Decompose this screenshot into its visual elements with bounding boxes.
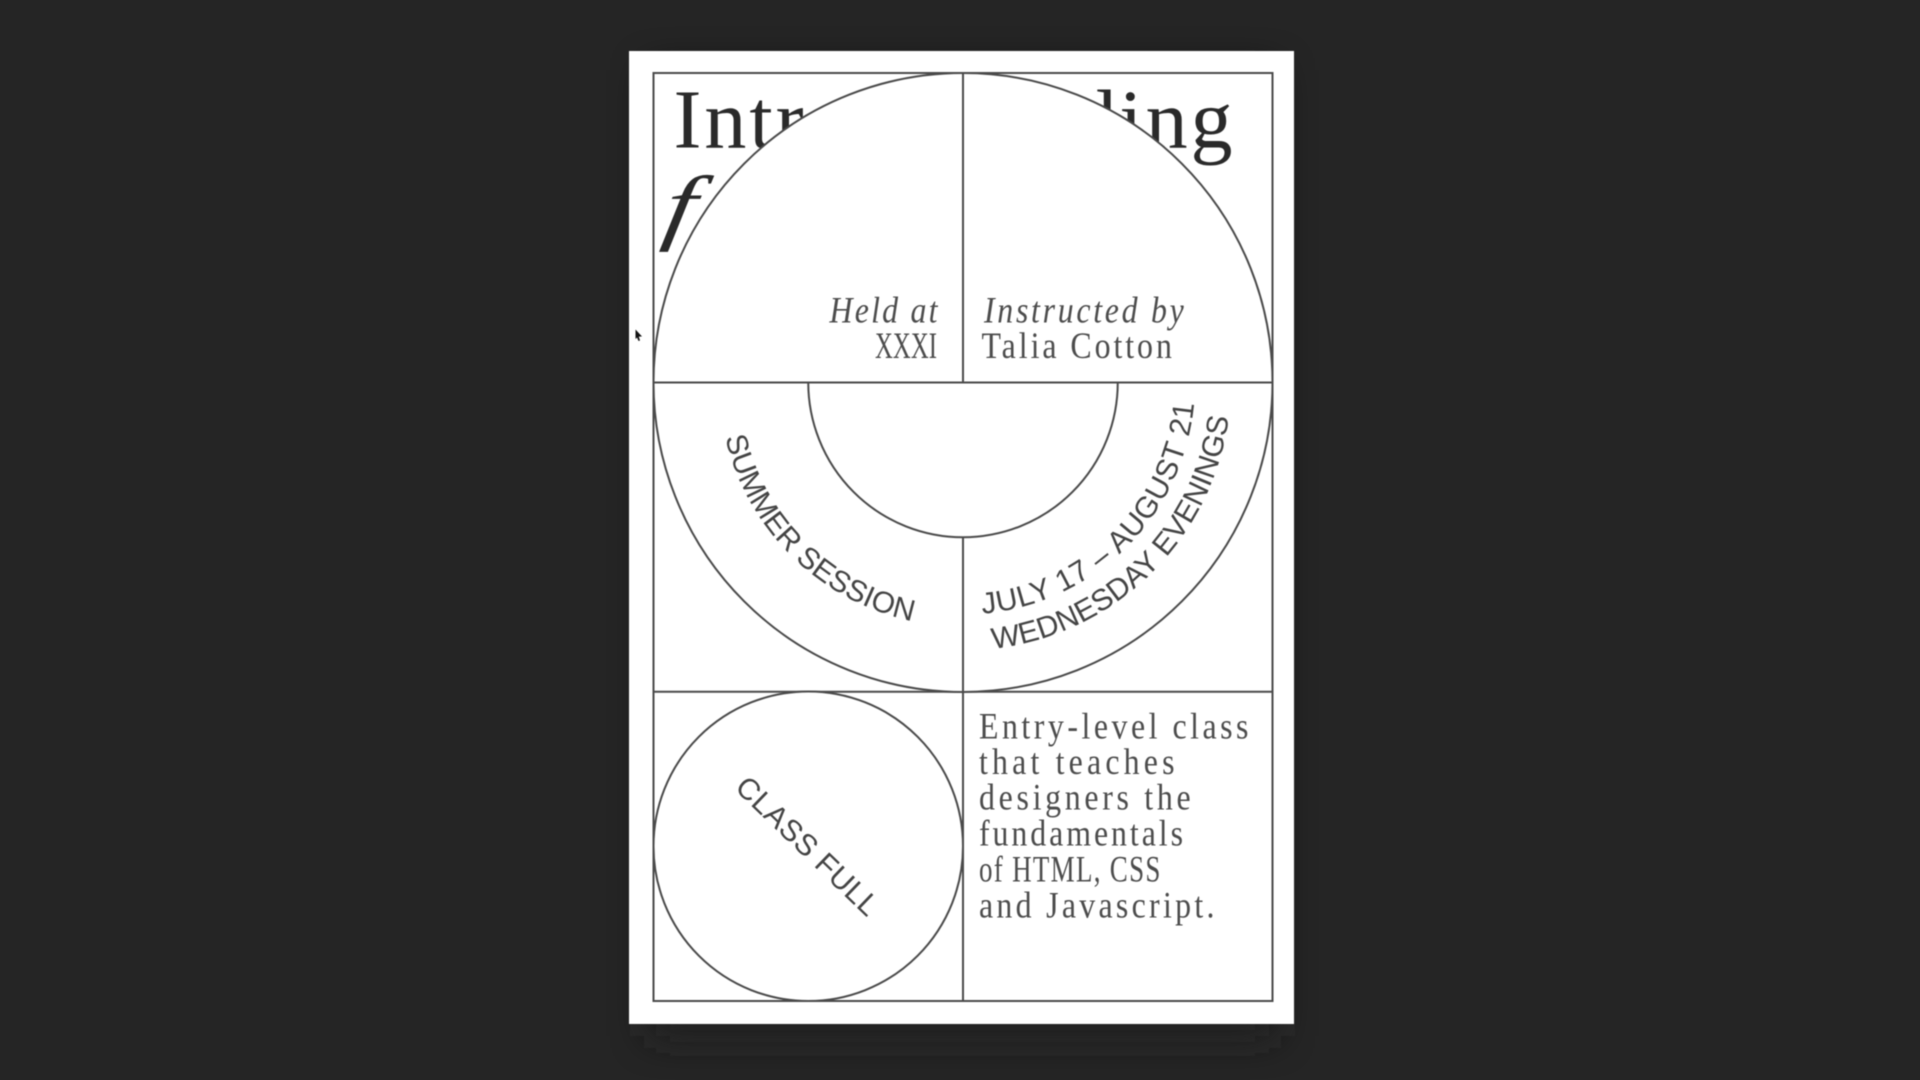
title: Intro to Coding xyxy=(674,74,1232,166)
text: class description: Entry-level class xyxy=(979,705,1248,747)
title: or Designers xyxy=(725,160,1161,253)
curved text: schedule: WEDNESDAY EVENINGS xyxy=(990,416,1229,649)
text: class description xyxy=(979,705,1248,926)
title: f xyxy=(658,160,717,253)
text: venue: Held at xyxy=(829,289,939,331)
text: instructor: Instructed by xyxy=(983,289,1184,331)
panel: class full circle xyxy=(654,692,963,1001)
text: venue: XXXI xyxy=(875,325,937,366)
icon: mouse cursor xyxy=(636,330,642,341)
text: class description: that teaches xyxy=(979,740,1175,782)
text: class description: fundamentals xyxy=(979,812,1183,854)
text: class description: designers the xyxy=(979,776,1191,818)
curved text: summer session: SUMMER SESSION xyxy=(726,434,916,622)
poster sheet xyxy=(629,51,1294,1024)
title xyxy=(658,74,1232,253)
text: instructor xyxy=(982,289,1184,367)
text: class description: of HTML, CSS xyxy=(979,850,1160,891)
text: instructor: Talia Cotton xyxy=(982,325,1172,367)
panel: lower half ring xyxy=(654,382,1272,692)
text: venue xyxy=(829,289,939,366)
panel: grid frame and dividers xyxy=(654,73,1272,1001)
text: class description: and Javascript. xyxy=(979,884,1214,926)
panel: top semicircle xyxy=(654,73,1272,382)
curved text: dates: JULY 17 – AUGUST 21 xyxy=(982,404,1195,614)
label: class full: CLASS FULL xyxy=(729,770,886,923)
